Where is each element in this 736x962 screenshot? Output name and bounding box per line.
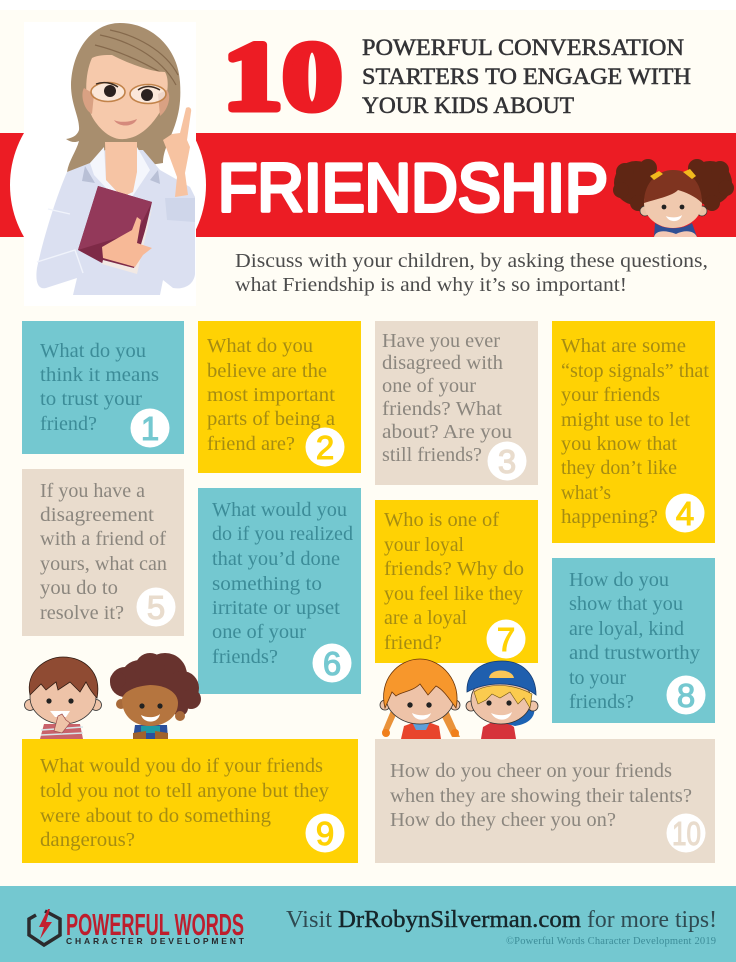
panel: question 6 bbox=[198, 488, 361, 694]
panel: question 4: What are some bbox=[561, 335, 686, 357]
footer call to action bbox=[286, 907, 717, 933]
panel: question 1: 1 bbox=[141, 410, 159, 447]
panel: question 3: about? Are you bbox=[382, 421, 512, 443]
panel: question 5: you do to bbox=[40, 577, 118, 599]
footer logo: CHARACTER DEVELOPMENT bbox=[66, 936, 245, 946]
panel: question 5: If you have a bbox=[40, 480, 145, 502]
panel: question 1: think it means bbox=[40, 364, 159, 386]
panel: question 1 bbox=[22, 321, 184, 454]
panel: question 8: How do you bbox=[569, 569, 669, 591]
panel: question 2: most important bbox=[207, 384, 335, 406]
illustration: boy with curly hair bbox=[110, 653, 201, 739]
panel: question 8 bbox=[552, 558, 715, 723]
panel: question 10: How do they cheer you on? bbox=[390, 809, 616, 831]
panel: question 1: friend? bbox=[40, 413, 97, 435]
big number 10: 10 bbox=[223, 23, 342, 130]
heading text: POWERFUL CONVERSATION bbox=[362, 35, 684, 60]
panel: question 10 bbox=[375, 739, 715, 863]
panel: question 3: friends? What bbox=[382, 398, 502, 420]
panel: question 6: irritate or upset bbox=[212, 597, 340, 619]
panel: question 4 bbox=[552, 321, 715, 543]
intro text: what Friendship is and why it’s so important! bbox=[235, 274, 627, 296]
heading text: YOUR KIDS ABOUT bbox=[362, 93, 574, 118]
panel: question 8: and trustworthy bbox=[569, 642, 700, 664]
panel: question 4: they don’t like bbox=[561, 457, 677, 479]
panel: question 8: friends? bbox=[569, 691, 634, 713]
illustration: boy with hand at mouth bbox=[24, 657, 102, 739]
panel: question 7: friend? bbox=[384, 632, 442, 654]
panel: question 2: believe are the bbox=[207, 360, 327, 382]
illustration: boy with blue cap bbox=[466, 661, 538, 739]
panel: question 8: to your bbox=[569, 667, 626, 689]
panel: question 7: your loyal bbox=[384, 534, 464, 556]
panel: question 4: you know that bbox=[561, 433, 677, 455]
panel: question 4: what’s bbox=[561, 482, 611, 504]
footer bbox=[0, 886, 736, 962]
panel: question 8: are loyal, kind bbox=[569, 618, 684, 640]
footer logo bbox=[29, 907, 245, 946]
panel: question 3: disagreed with bbox=[382, 352, 503, 374]
panel: question 7: are a loyal bbox=[384, 607, 467, 629]
panel: question 4: your friends bbox=[561, 384, 660, 406]
panel: question 5: disagreement bbox=[40, 504, 154, 526]
panel: question 4: might use to let bbox=[561, 409, 690, 431]
panel: question 8: 8 bbox=[677, 677, 695, 714]
illustration: teacher with book bbox=[24, 22, 196, 306]
panel: question 6: that you’d done bbox=[212, 548, 340, 570]
panel: question 10: 10 bbox=[672, 815, 701, 852]
panel: question 3: 3 bbox=[498, 443, 516, 480]
panel: question 6: do if you realized bbox=[212, 523, 353, 545]
illustration: girl with orange braids bbox=[380, 659, 460, 739]
footer logo: POWERFUL WORDS bbox=[66, 907, 244, 942]
illustration: girl with puffs bbox=[613, 159, 734, 237]
panel: question 7: you feel like they bbox=[384, 583, 523, 605]
panel: question 7: 7 bbox=[497, 621, 515, 658]
panel: question 5: 5 bbox=[147, 589, 165, 626]
panel: question 7: friends? Why do bbox=[384, 558, 524, 580]
panel: question 6: 6 bbox=[323, 645, 341, 682]
panel: question 9: What would you do if your friends bbox=[40, 755, 323, 777]
panel: question 3: still friends? bbox=[382, 444, 482, 466]
panel: question 4: 4 bbox=[676, 495, 694, 532]
friendship title: FRIENDSHIP bbox=[218, 150, 608, 226]
heading text bbox=[362, 35, 691, 118]
panel: question 6: one of your bbox=[212, 621, 306, 643]
red banner bbox=[0, 84, 736, 286]
panel: question 4: happening? bbox=[561, 506, 658, 528]
footer call to action: Visit bbox=[286, 907, 332, 933]
panel: question 2: parts of being a bbox=[207, 408, 335, 430]
panel: question 5: resolve it? bbox=[40, 602, 124, 624]
panel: question 2: friend are? bbox=[207, 433, 295, 455]
panel: question 2: 2 bbox=[316, 429, 334, 466]
panel: question 6: friends? bbox=[212, 646, 278, 668]
panel: question 9: told you not to tell anyone but they bbox=[40, 780, 329, 802]
panel: question 8: show that you bbox=[569, 593, 683, 615]
heading text: STARTERS TO ENGAGE WITH bbox=[362, 64, 691, 89]
footer call to action: DrRobynSilverman.com bbox=[338, 907, 581, 933]
copyright: ©Powerful Words Character Development 2019 bbox=[506, 936, 716, 947]
panel: question 10: when they are showing their talents? bbox=[390, 785, 692, 807]
panel: question 4: “stop signals” that bbox=[561, 360, 709, 382]
panel: question 2: What do you bbox=[207, 335, 313, 357]
intro text bbox=[235, 250, 708, 296]
panel: question 3: Have you ever bbox=[382, 330, 500, 352]
footer call to action: for more tips! bbox=[587, 907, 717, 933]
panel: question 9: dangerous? bbox=[40, 829, 135, 851]
panel: question 5 bbox=[22, 469, 184, 636]
panel: question 9 bbox=[22, 739, 358, 863]
panel: question 6: What would you bbox=[212, 499, 347, 521]
panel: question 6: something to bbox=[212, 573, 322, 595]
panel: question 1: What do you bbox=[40, 340, 146, 362]
panel: question 7: Who is one of bbox=[384, 509, 499, 531]
panel: question 7 bbox=[375, 500, 538, 663]
panel: question 2 bbox=[198, 321, 361, 473]
panel: question 9: 9 bbox=[316, 815, 334, 852]
panel: question 3 bbox=[375, 321, 538, 485]
panel: question 3: one of your bbox=[382, 375, 476, 397]
panel: question 10: How do you cheer on your friends bbox=[390, 760, 672, 782]
panel: question 5: with a friend of bbox=[40, 528, 166, 550]
intro text: Discuss with your children, by asking these questions, bbox=[235, 250, 708, 272]
panel: question 9: were about to do something bbox=[40, 805, 271, 827]
panel: question 5: yours, what can bbox=[40, 553, 167, 575]
panel: question 1: to trust your bbox=[40, 388, 142, 410]
